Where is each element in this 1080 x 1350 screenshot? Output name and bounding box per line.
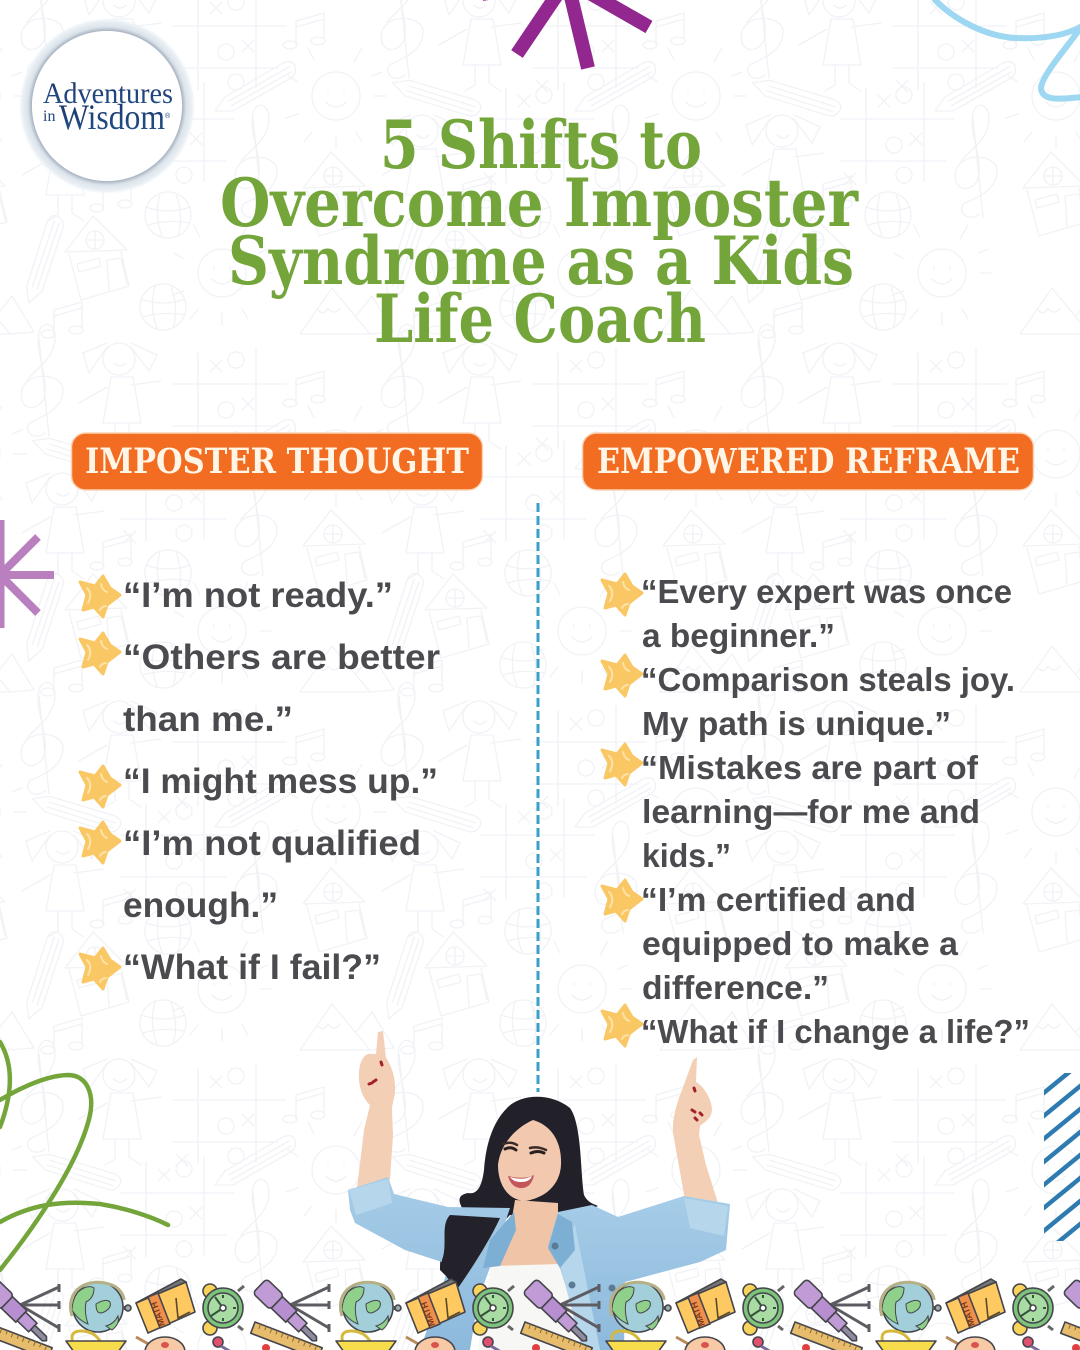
logo badge: Wisdom <box>59 97 165 137</box>
item: mistakes: learning—for me and <box>642 793 980 830</box>
title: Life Coach <box>374 280 706 358</box>
logo badge: Adventures <box>43 77 173 110</box>
jacket collar and buttons <box>483 1212 575 1268</box>
smile <box>508 1175 534 1188</box>
item: every expert <box>602 573 1012 654</box>
list: imposter thoughts <box>80 576 440 989</box>
item: not qualified: enough.” <box>123 886 278 925</box>
red nail polish <box>369 1062 702 1120</box>
item: mistakes <box>602 744 980 874</box>
decorative blue squiggle, top right <box>935 0 1080 99</box>
item: certified: “I’m certified and <box>641 881 916 918</box>
item: others are better: “Others are better <box>123 638 440 677</box>
brows and eyes <box>503 1143 546 1150</box>
heading: empowered reframe: EMPOWERED REFRAME <box>597 441 1020 482</box>
title <box>220 106 859 358</box>
logo badge: ® <box>165 112 171 120</box>
bottom strip of school icons <box>0 1279 1080 1350</box>
item: others are better: than me.” <box>123 700 293 739</box>
list: empowered reframes <box>602 573 1030 1050</box>
heading: empowered reframe <box>582 433 1034 490</box>
item: certified: difference.” <box>642 969 829 1006</box>
item: every expert: a beginner.” <box>642 617 835 654</box>
heading: imposter thought <box>72 433 482 490</box>
white top <box>478 1264 578 1350</box>
heading: imposter thought: IMPOSTER THOUGHT <box>85 441 469 482</box>
item: every expert: “Every expert was once <box>641 573 1012 610</box>
item: certified: equipped to make a <box>642 925 959 962</box>
logo badge <box>19 18 195 194</box>
neck and chest <box>498 1200 568 1270</box>
item: mistakes: “Mistakes are part of <box>641 749 979 786</box>
item: change a life: “What if I change a life?” <box>641 1013 1030 1050</box>
item: might mess up: “I might mess up.” <box>123 762 438 801</box>
item: certified <box>602 880 959 1006</box>
denim jacket left side and sleeve <box>348 1177 510 1350</box>
hair behind shoulders <box>440 1097 598 1285</box>
decorative purple burst, top <box>482 0 649 68</box>
item: not qualified <box>80 822 421 925</box>
left arm and hand <box>357 1031 395 1188</box>
right arm and hand <box>673 1057 718 1203</box>
face <box>498 1120 561 1201</box>
item: comparison: “Comparison steals joy. <box>641 661 1015 698</box>
dashed column divider <box>536 503 540 1092</box>
hair strands over sleeve <box>442 1215 500 1288</box>
denim jacket right side and sleeve <box>548 1196 730 1350</box>
title: Syndrome as a Kids <box>228 222 854 300</box>
jacket shading <box>349 1179 728 1350</box>
decorative green squiggle, left <box>0 1042 168 1270</box>
decorative blue diagonal stripes, right <box>1044 1073 1080 1241</box>
item: what if I fail: “What if I fail?” <box>123 948 381 987</box>
title: Overcome Imposter <box>220 164 859 242</box>
title: 5 Shifts to <box>380 106 702 184</box>
decorative lilac burst, left <box>0 520 54 628</box>
item: comparison <box>602 655 1015 742</box>
item: others are better <box>80 633 440 739</box>
item: comparison: My path is unique.” <box>642 705 951 742</box>
item: not qualified: “I’m not qualified <box>123 824 421 863</box>
item: not ready: “I’m not ready.” <box>123 576 393 615</box>
item: mistakes: kids.” <box>642 837 731 874</box>
woman pointing upward with both hands <box>348 1031 730 1350</box>
logo badge: in <box>43 108 55 125</box>
